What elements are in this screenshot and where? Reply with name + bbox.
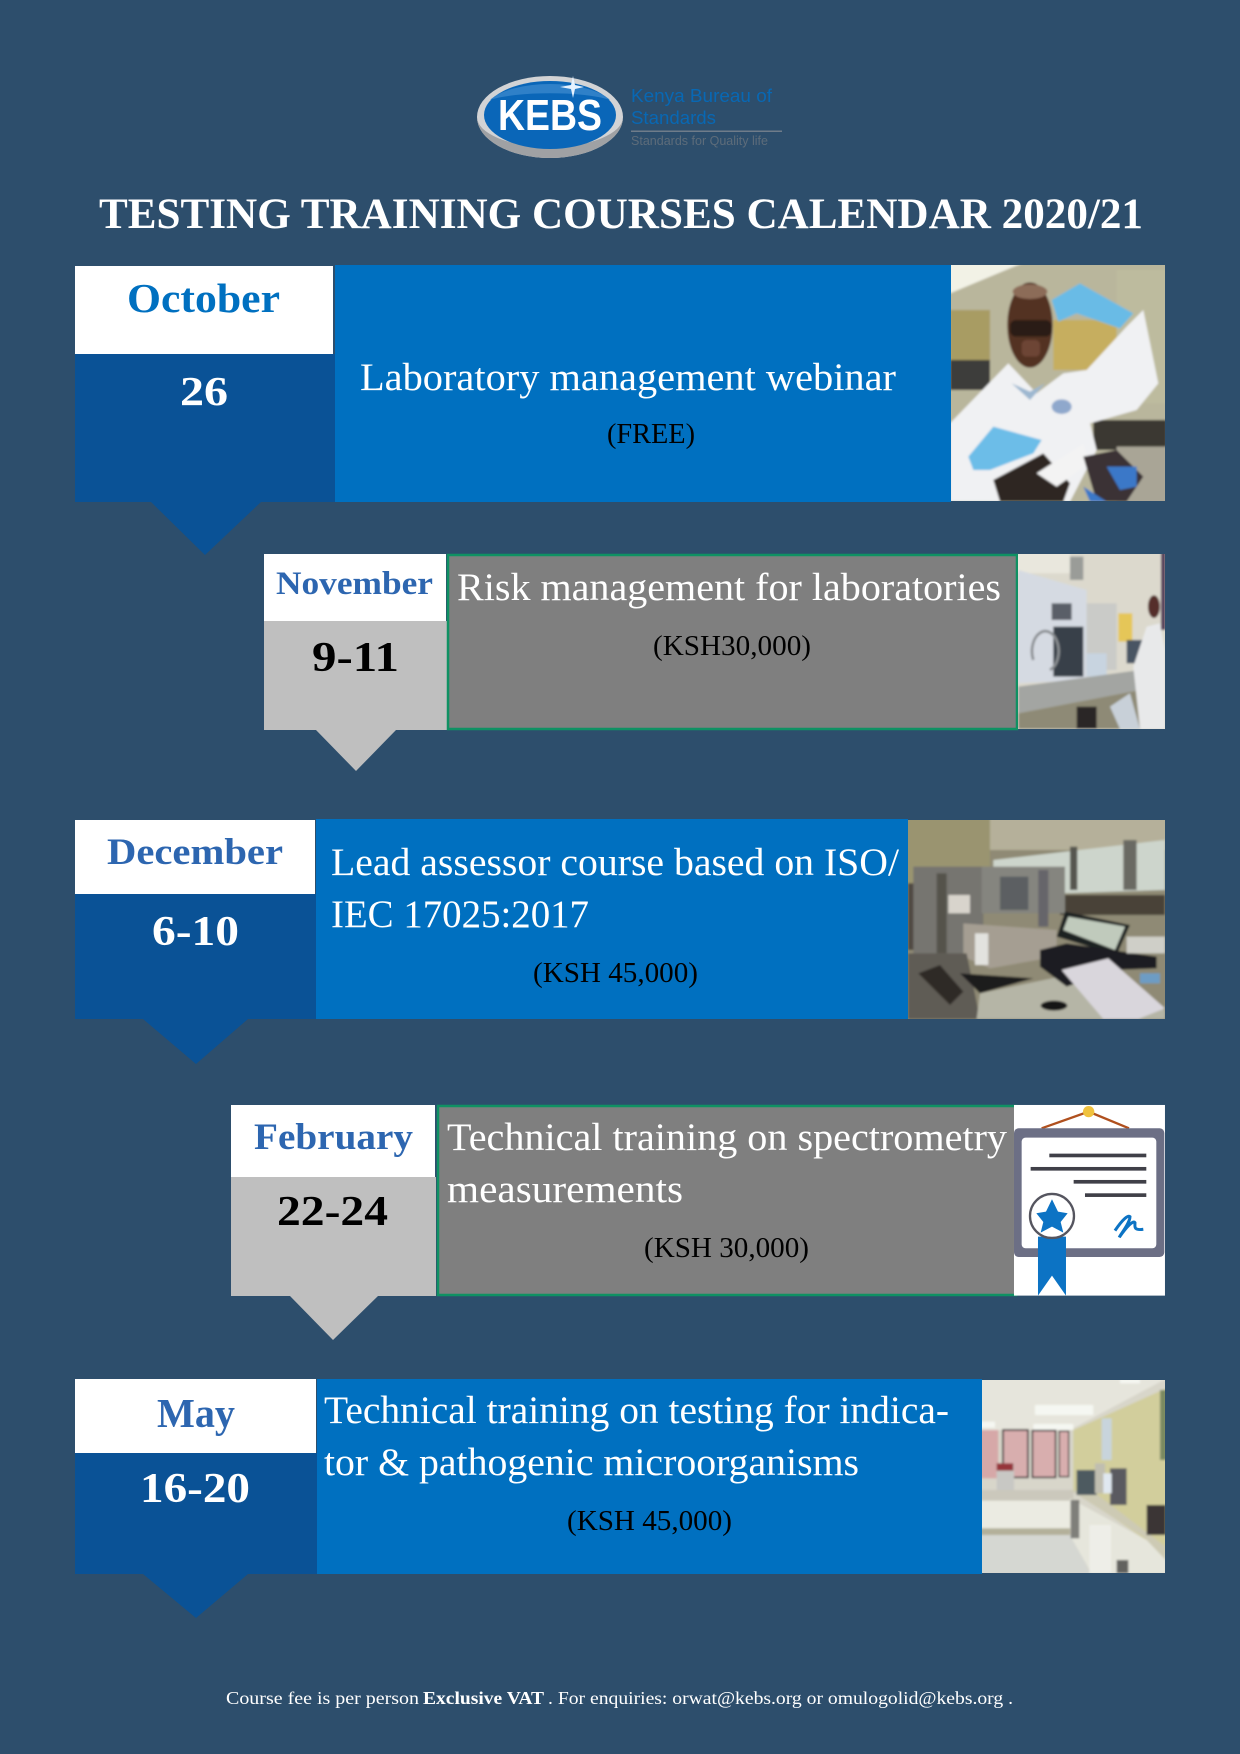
- month: November: November: [276, 566, 433, 602]
- course: Indicator and pathogenic microorganisms: tor & pathogenic microorganisms: [324, 1441, 859, 1484]
- month: December: [75, 820, 315, 894]
- date: 26 with arrow: 26: [180, 368, 228, 414]
- footer note: Exclusive VAT: [423, 1688, 544, 1708]
- course: Laboratory management webinar: Laboratory management webinar: [360, 356, 896, 399]
- month: October: [75, 266, 333, 354]
- logo text: Kenya Bureau of: [631, 86, 773, 106]
- course: Risk management for laboratories: Risk management for laboratories: [457, 566, 1001, 609]
- panel: May: [75, 1377, 1173, 1618]
- course: Spectrometry: measurements: [447, 1168, 683, 1211]
- panel: December: [75, 817, 1170, 1064]
- icon: KEBS oval: [477, 76, 623, 158]
- icon: certificate: [1014, 1105, 1165, 1296]
- date: 6-10 with arrow: [75, 894, 316, 1064]
- date: 9-11 with arrow: [264, 621, 447, 771]
- month: December: December: [107, 832, 283, 873]
- logo text: Standards: [631, 108, 716, 128]
- month: November: [264, 554, 446, 621]
- panel: October: [75, 260, 1170, 555]
- logo text: [631, 86, 782, 148]
- date: 16-20 with arrow: [75, 1453, 317, 1618]
- course: Lead assessor course: [316, 819, 908, 1019]
- month: October: October: [127, 275, 280, 321]
- course: Lead assessor course: Lead assessor course based on ISO/: [331, 841, 899, 884]
- course: Indicator and pathogenic microorganisms: (KSH 45,000): [567, 1505, 732, 1537]
- logo text: Standards for Quality life: [631, 133, 768, 148]
- month: February: [231, 1105, 435, 1177]
- photo: laboratory instruments: [1018, 554, 1165, 729]
- course: Laboratory management webinar: (FREE): [607, 418, 695, 450]
- date: 22-24 with arrow: 22-24: [277, 1189, 388, 1235]
- footer note: Course fee is per person: [226, 1688, 419, 1708]
- logo: KEBS: [477, 76, 782, 158]
- month: May: [75, 1379, 316, 1453]
- title: TESTING TRAINING COURSES CALENDAR 2020/21: [99, 191, 1143, 238]
- footer note: [226, 1688, 1013, 1708]
- course: Laboratory management webinar: [335, 265, 951, 502]
- panel: February: [231, 1105, 1165, 1340]
- course: Spectrometry: (KSH 30,000): [644, 1232, 809, 1264]
- course: Spectrometry: Technical training on spectrometry: [447, 1116, 1008, 1159]
- icon: KEBS oval: KEBS: [498, 91, 602, 140]
- date: 26 with arrow: [75, 354, 335, 555]
- course: Indicator and pathogenic microorganisms: Technical training on testing for indica-: [324, 1389, 949, 1432]
- photo: scientist with vials: [947, 260, 1170, 507]
- photo: laboratory room: [982, 1380, 1165, 1573]
- course: Lead assessor course: IEC 17025:2017: [331, 893, 589, 936]
- month: February: February: [254, 1117, 414, 1158]
- photo: testing machines: [903, 817, 1170, 1023]
- date: 22-24 with arrow: [231, 1177, 436, 1340]
- course: Risk management for laboratories: (KSH30,000): [653, 630, 811, 662]
- date: 9-11 with arrow: 9-11: [312, 635, 399, 681]
- course: Indicator and pathogenic microorganisms: [317, 1379, 982, 1574]
- footer note: . For enquiries: orwat@kebs.org or omulogolid@kebs.org .: [548, 1688, 1013, 1708]
- date: 16-20 with arrow: 16-20: [140, 1466, 250, 1512]
- panel: November: [264, 550, 1170, 771]
- course: Lead assessor course: (KSH 45,000): [533, 957, 698, 989]
- month: May: May: [157, 1390, 235, 1436]
- course: Risk management for laboratories: [448, 555, 1017, 729]
- date: 6-10 with arrow: 6-10: [152, 909, 239, 955]
- course: Spectrometry: [438, 1106, 1016, 1295]
